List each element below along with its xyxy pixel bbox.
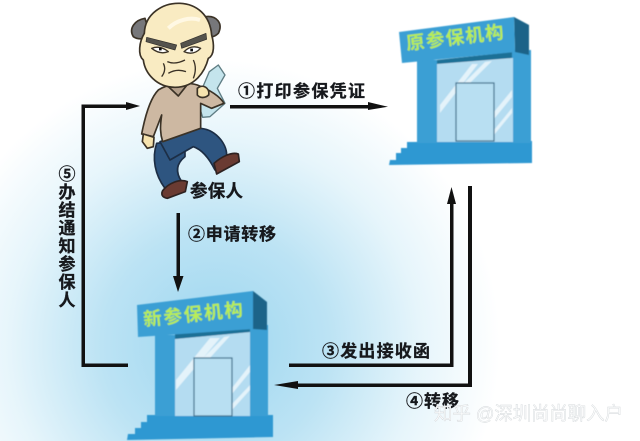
- beam shadow: [437, 52, 512, 64]
- arrow: step 2: [173, 213, 184, 292]
- pupils: [159, 48, 193, 51]
- window: [437, 58, 513, 142]
- arrow: step 4: [274, 186, 472, 389]
- beam shadow: [175, 326, 250, 339]
- arrow: step 3: [289, 187, 456, 367]
- eyebrows: [146, 33, 207, 50]
- back leg: [154, 140, 185, 188]
- label: step 2: ②申请转移: [188, 224, 276, 244]
- label: step 3: ③发出接收函: [322, 341, 430, 361]
- document roll: [197, 65, 225, 117]
- beam front: [399, 17, 515, 63]
- watermark: 知乎 @深圳尚尚聊入户: [434, 403, 623, 424]
- hand: [142, 86, 209, 148]
- beam side: [514, 17, 529, 55]
- label: step 5 vertical: ⑤办结通知参保人: [56, 165, 75, 308]
- window: [175, 332, 250, 416]
- label: step 4: ④转移: [406, 392, 459, 411]
- label: step 1: ①打印参保凭证: [238, 81, 365, 101]
- steps: [127, 415, 273, 440]
- beam label: 原参保机构: [405, 21, 505, 54]
- pillars: [155, 325, 268, 416]
- sweater: [142, 83, 224, 142]
- shoes: [162, 153, 239, 198]
- pillars: [417, 50, 531, 143]
- arrow: step 1: [230, 102, 388, 110]
- label: insured person: 参保人: [190, 181, 244, 201]
- beam side: [253, 291, 267, 330]
- arrow: step 5: [82, 102, 140, 367]
- door: [194, 358, 232, 416]
- collar: [167, 83, 188, 96]
- building: original insurance agency: [389, 17, 532, 165]
- head: [140, 3, 213, 87]
- character: insured person: [132, 3, 239, 198]
- window glare: [176, 336, 250, 410]
- window glare: [440, 61, 512, 135]
- bald highlight: [168, 19, 200, 28]
- steps: [389, 141, 532, 165]
- side hair: [132, 16, 220, 39]
- front leg: [160, 128, 227, 170]
- mouth and wrinkles: [162, 60, 195, 78]
- building: new insurance agency: [127, 291, 273, 440]
- beam label: 新参保机构: [142, 299, 244, 330]
- door: [456, 83, 494, 141]
- eyes: [152, 47, 201, 53]
- beam front: [137, 291, 253, 337]
